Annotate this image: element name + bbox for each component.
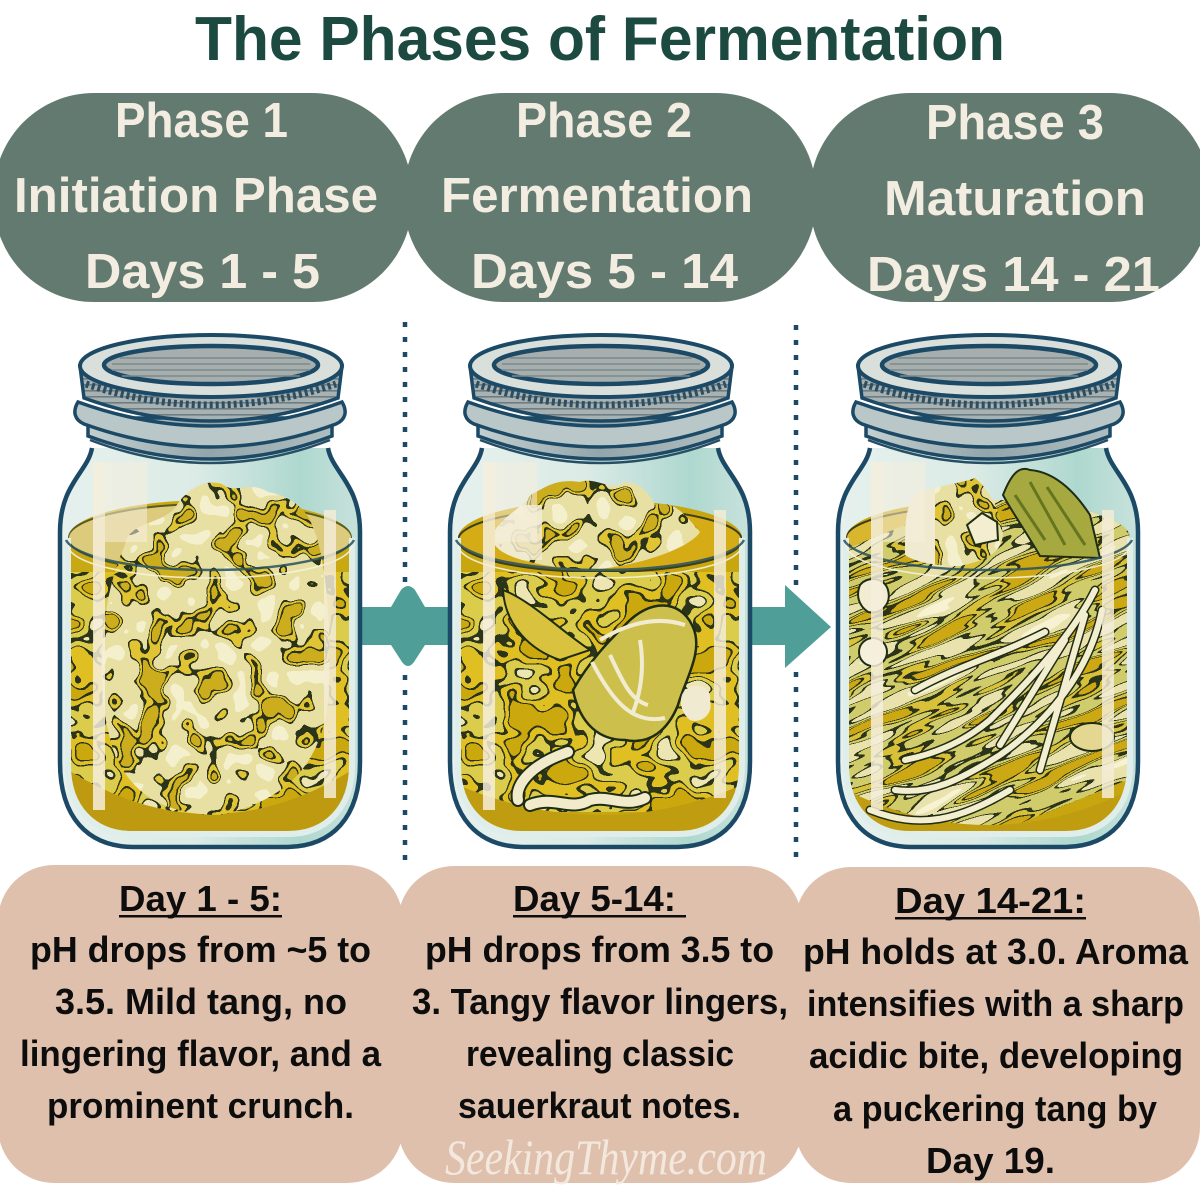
panel: day 1-5: pH drops from ~5 to bbox=[30, 929, 371, 970]
panel: day 5-14 bbox=[398, 866, 802, 1183]
panel: day 14-21: Day 19. bbox=[926, 1140, 1055, 1181]
header pill: phase 3: Days 14 - 21 bbox=[867, 248, 1160, 302]
header pill: phase 2: Phase 2 bbox=[516, 94, 692, 148]
header pill: phase 2: Fermentation bbox=[441, 169, 753, 223]
panel: day 14-21: intensifies with a sharp bbox=[807, 983, 1184, 1024]
panel: day 1-5 bbox=[0, 865, 403, 1183]
header pill: phase 3: Maturation bbox=[884, 172, 1146, 226]
jar: phase 3 bbox=[836, 333, 1140, 850]
panel: day 5-14: 3. Tangy flavor lingers, bbox=[412, 981, 788, 1022]
watermark: SeekingThyme.com bbox=[445, 1129, 767, 1185]
panel: day 5-14: pH drops from 3.5 to bbox=[425, 929, 774, 970]
panel: day 14-21: acidic bite, developing bbox=[809, 1035, 1183, 1076]
title: The Phases of Fermentation bbox=[195, 5, 1005, 74]
panel: day 1-5: Day 1 - 5: bbox=[119, 878, 282, 919]
panel: day 1-5: 3.5. Mild tang, no bbox=[55, 981, 347, 1022]
panel: day 14-21: Day 14-21: bbox=[895, 880, 1086, 921]
header pill: phase 2 bbox=[404, 93, 816, 302]
jar: phase 2 bbox=[450, 335, 750, 847]
arrow: phase 2 to phase 3 bbox=[750, 585, 831, 668]
header pill: phase 2: Days 5 - 14 bbox=[471, 245, 738, 299]
header pill: phase 1: Phase 1 bbox=[115, 94, 288, 148]
panel: day 5-14: sauerkraut notes. bbox=[458, 1085, 741, 1126]
panel: day 5-14: Day 5-14: bbox=[513, 878, 676, 919]
header pill: phase 1: Days 1 - 5 bbox=[85, 245, 320, 299]
arrow: phase 1 to phase 2 bbox=[362, 586, 450, 666]
panel: day 14-21: pH holds at 3.0. Aroma bbox=[803, 931, 1189, 972]
panel: day 14-21: a puckering tang by bbox=[833, 1088, 1157, 1129]
header pill: phase 3 bbox=[810, 93, 1200, 302]
panel: day 5-14: revealing classic bbox=[466, 1033, 734, 1074]
panel: day 1-5: prominent crunch. bbox=[47, 1085, 354, 1126]
header pill: phase 3: Phase 3 bbox=[926, 96, 1104, 150]
jar: phase 1 bbox=[60, 335, 360, 847]
panel: day 1-5: lingering flavor, and a bbox=[20, 1033, 382, 1074]
header pill: phase 1: Initiation Phase bbox=[14, 169, 378, 223]
header pill: phase 1 bbox=[0, 93, 412, 302]
panel: day 14-21 bbox=[795, 867, 1200, 1183]
